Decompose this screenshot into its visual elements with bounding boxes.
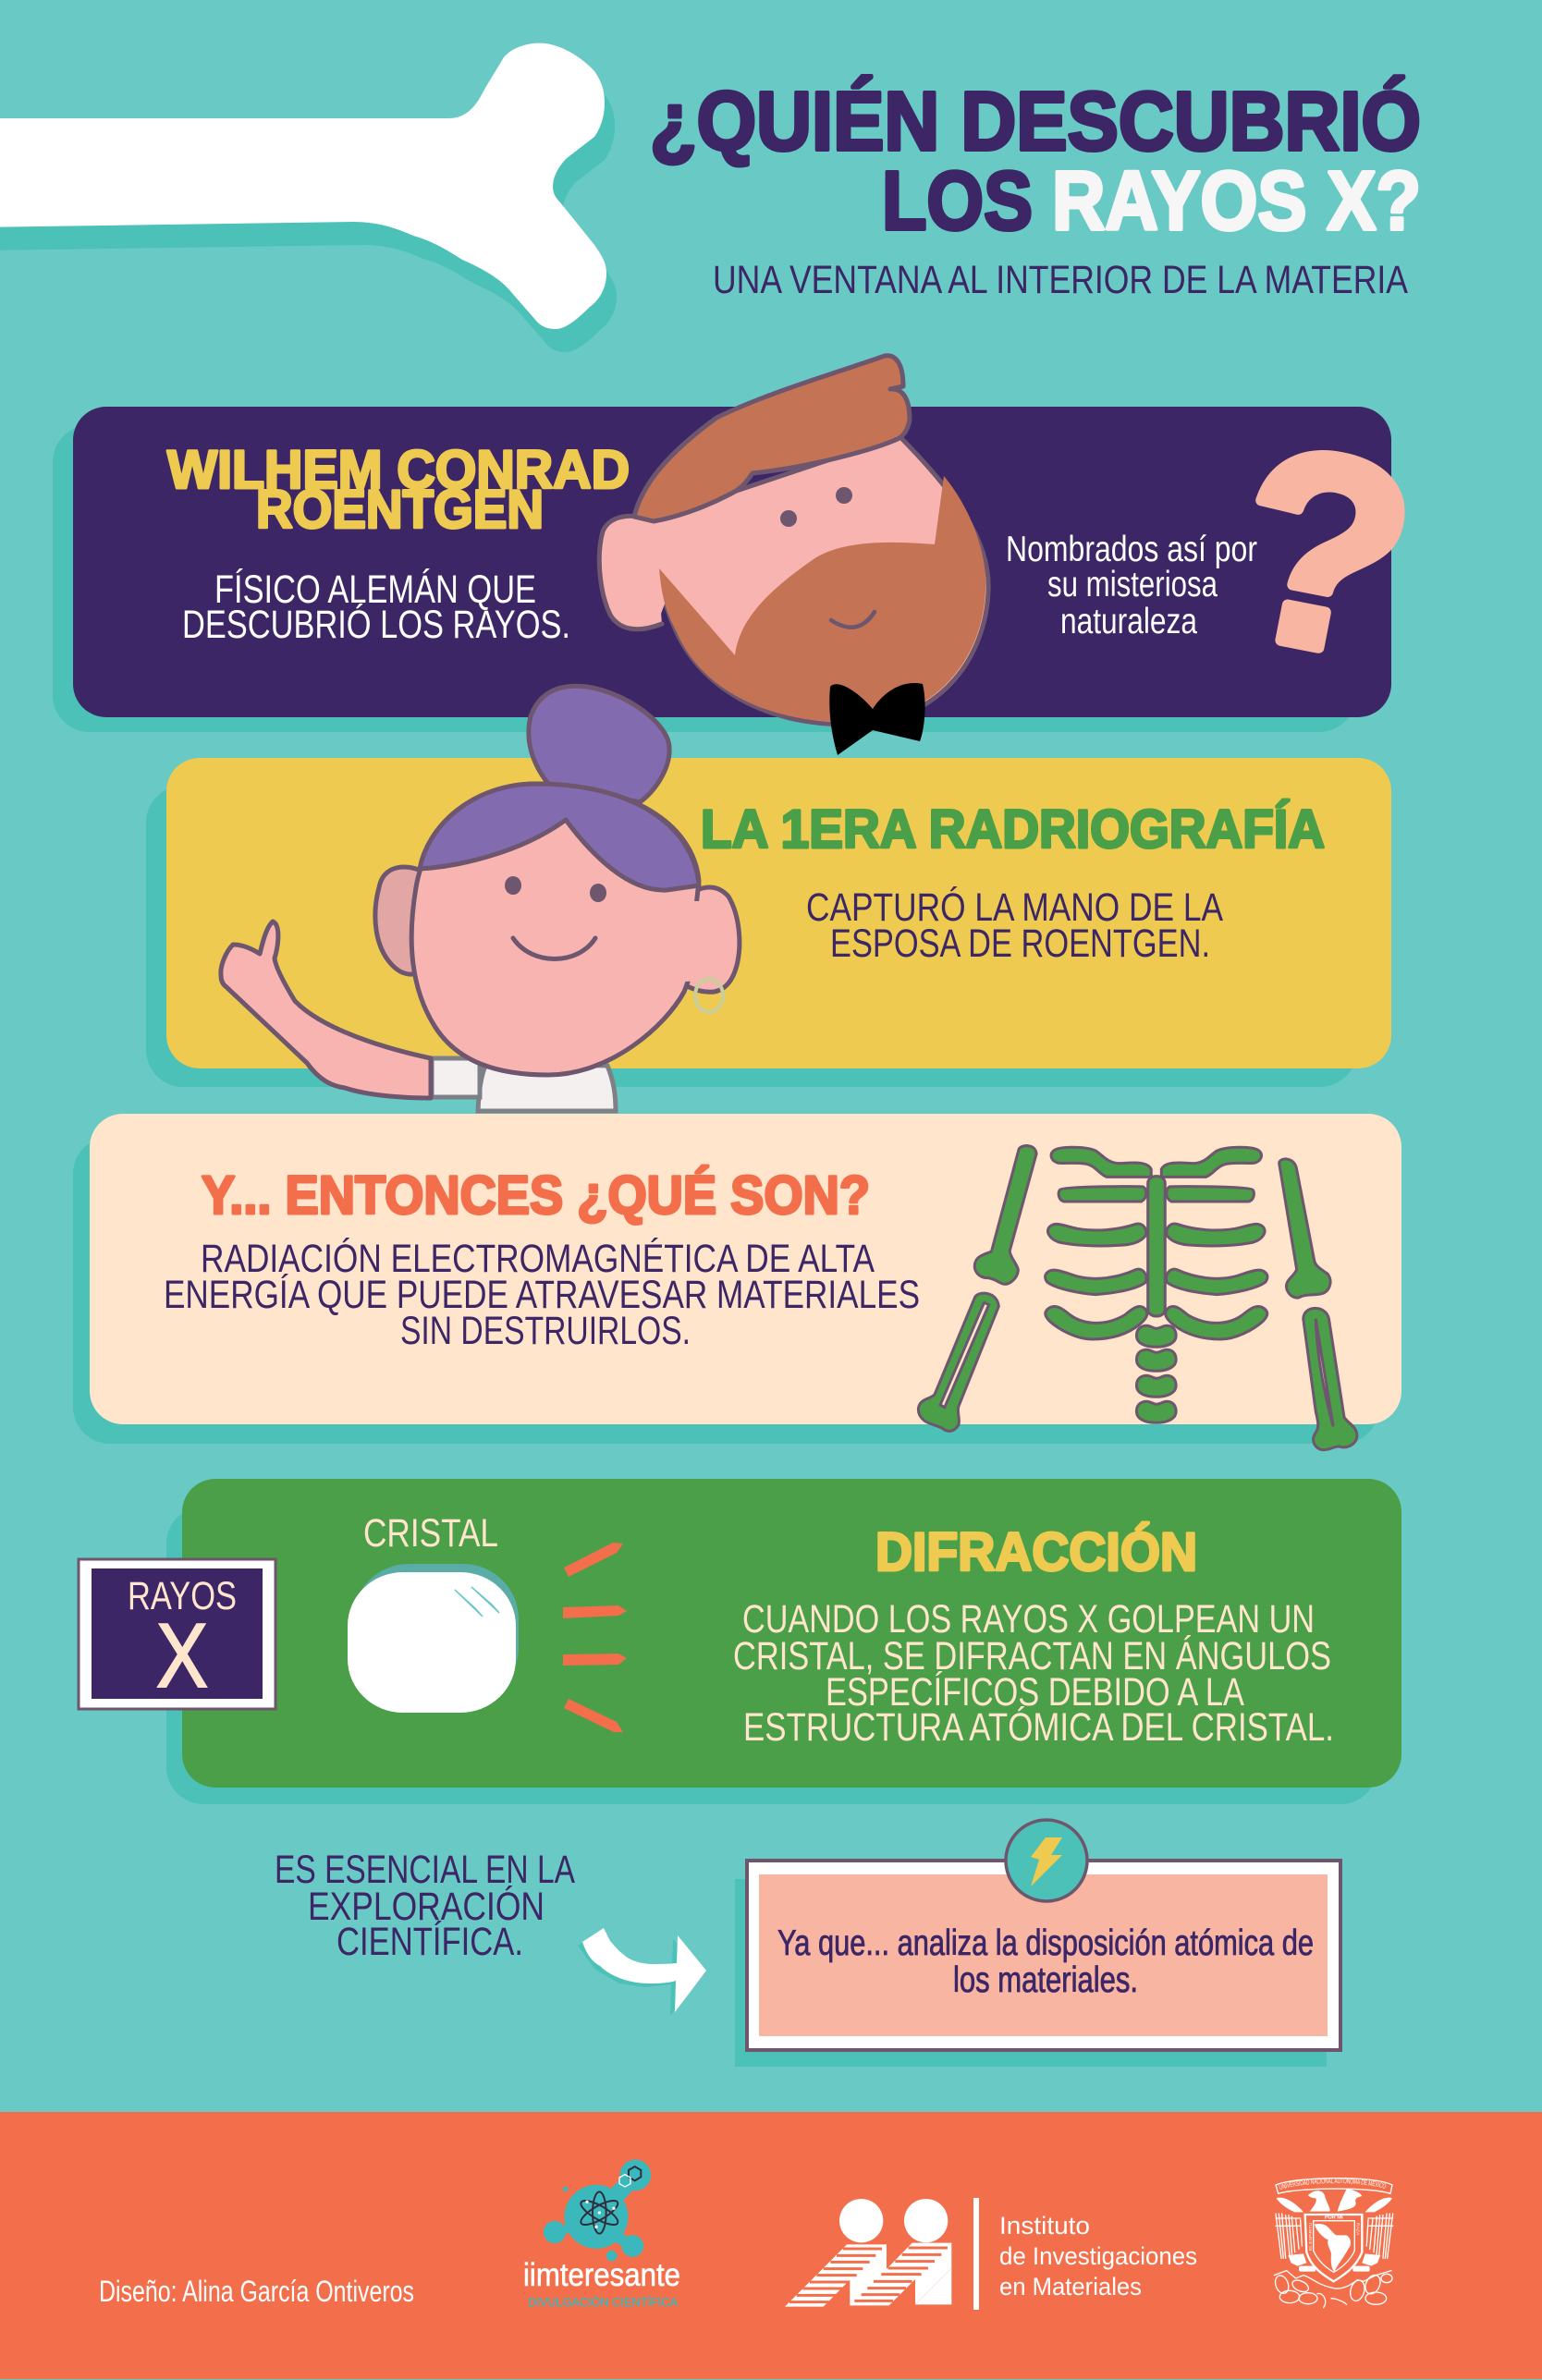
text: es esencial: CIENTÍFICA. — [337, 1920, 523, 1964]
text: capturó la mano: ESPOSA DE ROENTGEN. — [830, 921, 1210, 966]
logo: IIM: de Investigaciones — [999, 2242, 1197, 2270]
beard — [659, 476, 985, 722]
logo: UNAM crest: EL ESPIRITU — [1308, 2222, 1314, 2251]
text: cuando los rayos: ESPECÍFICOS DEBIDO A LA — [826, 1670, 1244, 1715]
label: cristal: CRISTAL — [363, 1511, 498, 1556]
talons — [1288, 2253, 1380, 2272]
character: woman — [221, 686, 740, 1111]
character: Roentgen head — [599, 356, 988, 755]
heading: Wilhem Conrad Roentgen — [167, 440, 630, 540]
ear join — [638, 519, 670, 621]
text: nombrados así: naturaleza — [1060, 602, 1197, 641]
heading: difracción: DIFRACCIÓN — [875, 1522, 1197, 1582]
smile — [513, 938, 595, 959]
logo: iimteresante: DIVULGACIÓN CIENTÍFICA — [528, 2295, 678, 2309]
torso — [478, 1063, 616, 1111]
text: nombrados así — [1006, 530, 1257, 641]
hair — [420, 784, 699, 890]
icon: skeleton — [918, 1146, 1357, 1450]
logo: UNAM crest — [1274, 2178, 1394, 2309]
right ear — [678, 887, 740, 992]
text: cuando los rayos: CRISTAL, SE DIFRACTAN EN ÁNGULOS — [733, 1634, 1331, 1678]
face — [654, 436, 988, 725]
text: capturó la mano: CAPTURÓ LA MANO DE LA — [806, 885, 1223, 930]
panel: difracción — [79, 1479, 1401, 1804]
icon: crystal — [348, 1564, 519, 1713]
heading: la 1era radriografía: LA 1ERA RADRIOGRAFÍA — [701, 799, 1325, 860]
text: radiación electromagnética: RADIACIÓN ELECTROMAGNÉTICA DE ALTA — [201, 1237, 875, 1281]
text: cuando los rayos: CUANDO LOS RAYOS X GOLPEAN UN — [742, 1597, 1315, 1642]
logo: iimteresante — [523, 2160, 680, 2309]
smile — [831, 612, 875, 628]
logo: UNAM crest: POR MI — [1325, 2215, 1343, 2221]
title — [650, 75, 1421, 248]
wings — [1276, 2198, 1393, 2258]
text: nombrados así: Nombrados así por — [1006, 530, 1257, 569]
text: nombrados así: su misteriosa — [1047, 565, 1218, 604]
text: analiza la disposición: Ya que... analiza la disposición atómica de — [777, 1923, 1314, 1963]
bow tie — [829, 683, 925, 755]
text: cuando los rayos — [733, 1597, 1334, 1750]
eyes — [505, 876, 606, 902]
box: rayos X — [79, 1559, 275, 1709]
icon: question mark: ? — [1212, 386, 1435, 718]
text: radiación electromagnética — [164, 1237, 920, 1353]
title: ¿QUIÉN DESCUBRIÓ — [650, 75, 1421, 168]
logo: IIM: Instituto — [999, 2212, 1090, 2240]
text: analiza la disposición: los materiales. — [953, 1960, 1138, 2000]
box: rayos X: RAYOS — [128, 1574, 237, 1618]
hair — [634, 356, 910, 521]
bun — [529, 686, 669, 802]
panel: primera radiografía — [146, 758, 1391, 1087]
logo: IIM: en Materiales — [999, 2273, 1142, 2301]
text: es esencial — [275, 1848, 575, 1964]
box: rayos X: X — [156, 1605, 208, 1706]
subtitle: UNA VENTANA AL INTERIOR DE LA MATERIA — [713, 258, 1408, 302]
text: cuando los rayos: ESTRUCTURA ATÓMICA DEL CRISTAL. — [743, 1705, 1334, 1750]
credit: Diseño: Alina García Ontiveros — [99, 2275, 414, 2308]
shield — [1305, 2215, 1362, 2281]
text: físico alemán: DESCUBRIÓ LOS RAYOS. — [182, 603, 570, 647]
logo: UNAM crest: UNIVERSIDAD NACIONAL AUTÓNOMA DE MÉXICO — [1279, 2178, 1387, 2190]
arm — [221, 921, 431, 1098]
panel: Roentgen — [53, 386, 1435, 732]
logo: iimteresante: iimteresante — [523, 2257, 680, 2293]
text: físico alemán: FÍSICO ALEMÁN QUE — [214, 568, 536, 612]
text: analiza la disposición — [777, 1923, 1314, 2000]
heading: Wilhem Conrad Roentgen: WILHEM CONRAD — [167, 440, 630, 500]
callout: ya que — [735, 1820, 1340, 2067]
icon: lightning bolt — [1006, 1820, 1087, 1901]
panel: qué son — [73, 1114, 1401, 1450]
arrow — [578, 1928, 706, 2016]
text: radiación electromagnética: SIN DESTRUIRLOS. — [400, 1309, 691, 1353]
condor head — [1338, 2189, 1362, 2212]
eyes — [780, 487, 852, 527]
title: RAYOS X? — [1052, 155, 1421, 248]
left ear — [375, 867, 421, 974]
logo: IIM — [785, 2198, 1197, 2310]
cactus and rocks — [1273, 2271, 1392, 2308]
title: LOS — [882, 155, 1033, 248]
map — [1315, 2224, 1351, 2271]
logo: UNAM crest: RAZA — [1354, 2223, 1360, 2236]
face — [411, 784, 699, 1075]
text: es esencial: ES ESENCIAL EN LA — [275, 1848, 575, 1892]
footer band — [0, 2112, 1542, 2379]
ear — [599, 516, 662, 629]
icon: bone — [0, 43, 617, 352]
ear join — [684, 901, 726, 982]
icon: diffracted rays — [563, 1543, 627, 1732]
eagle head — [1308, 2191, 1330, 2212]
text: es esencial: EXPLORACIÓN — [308, 1885, 545, 1929]
text: radiación electromagnética: ENERGÍA QUE PUEDE ATRAVESAR MATERIALES — [164, 1273, 920, 1317]
text: físico alemán — [182, 568, 570, 647]
earring — [695, 979, 723, 1012]
sleeve — [432, 1058, 480, 1097]
heading: entonces qué son: Y... ENTONCES ¿QUÉ SON? — [202, 1166, 870, 1226]
text: capturó la mano — [806, 885, 1223, 966]
heading: Wilhem Conrad Roentgen: ROENTGEN — [256, 480, 544, 540]
